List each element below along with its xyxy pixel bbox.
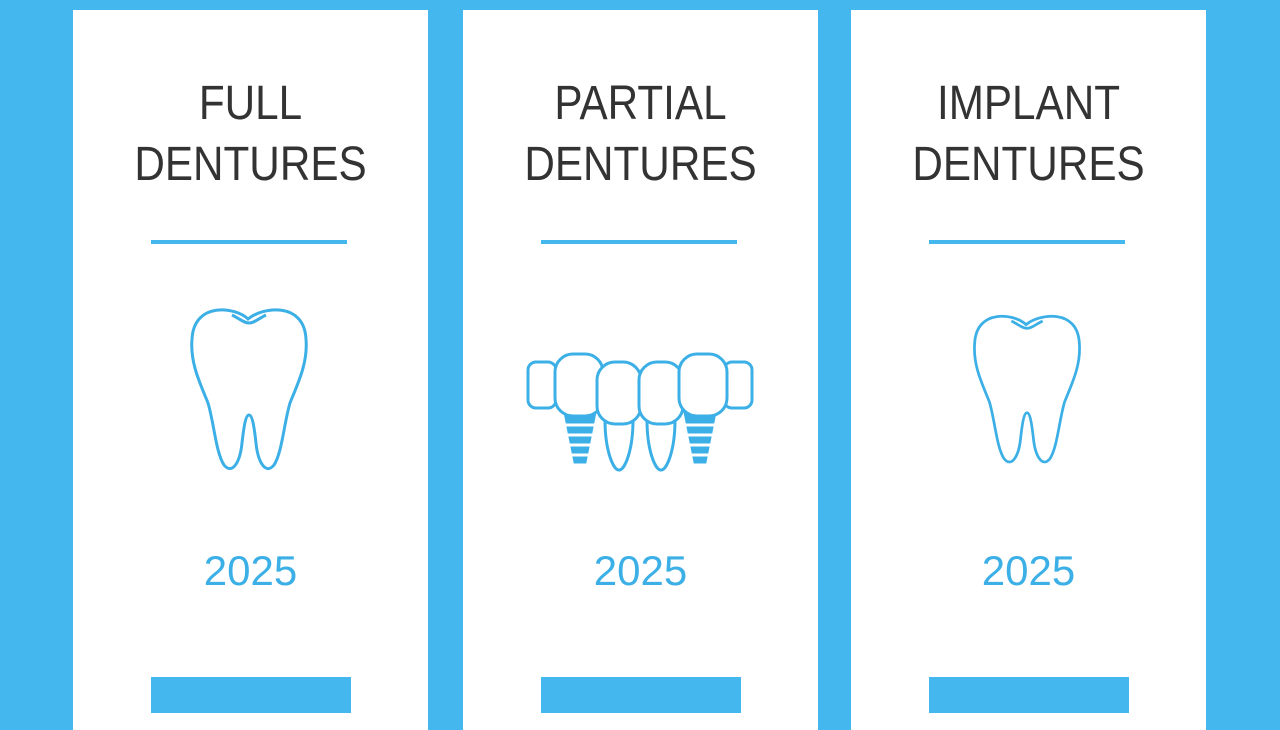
year: 2025 [204, 547, 297, 594]
panel: implant dentures [851, 10, 1206, 730]
bottom bar [929, 677, 1129, 713]
year: 2025 [982, 547, 1075, 594]
bottom bar [541, 677, 741, 713]
heading: full dentures: FULL [199, 77, 302, 130]
icon: partial denture bridge [526, 352, 754, 472]
panel: full dentures [73, 10, 428, 730]
heading: implant dentures [912, 77, 1145, 191]
heading: partial dentures: PARTIAL [554, 77, 727, 130]
panel: partial dentures [463, 10, 818, 730]
year: 2025 [594, 547, 687, 594]
heading: implant dentures: DENTURES [912, 138, 1145, 191]
heading: full dentures: DENTURES [134, 138, 367, 191]
divider line [151, 240, 347, 244]
divider line [541, 240, 737, 244]
divider line [929, 240, 1125, 244]
heading: partial dentures [524, 77, 757, 191]
icon: tooth [973, 314, 1081, 464]
heading: partial dentures: DENTURES [524, 138, 757, 191]
bottom bar [151, 677, 351, 713]
icon: tooth [190, 308, 308, 470]
heading: full dentures [134, 77, 367, 191]
heading: implant dentures: IMPLANT [937, 77, 1120, 130]
